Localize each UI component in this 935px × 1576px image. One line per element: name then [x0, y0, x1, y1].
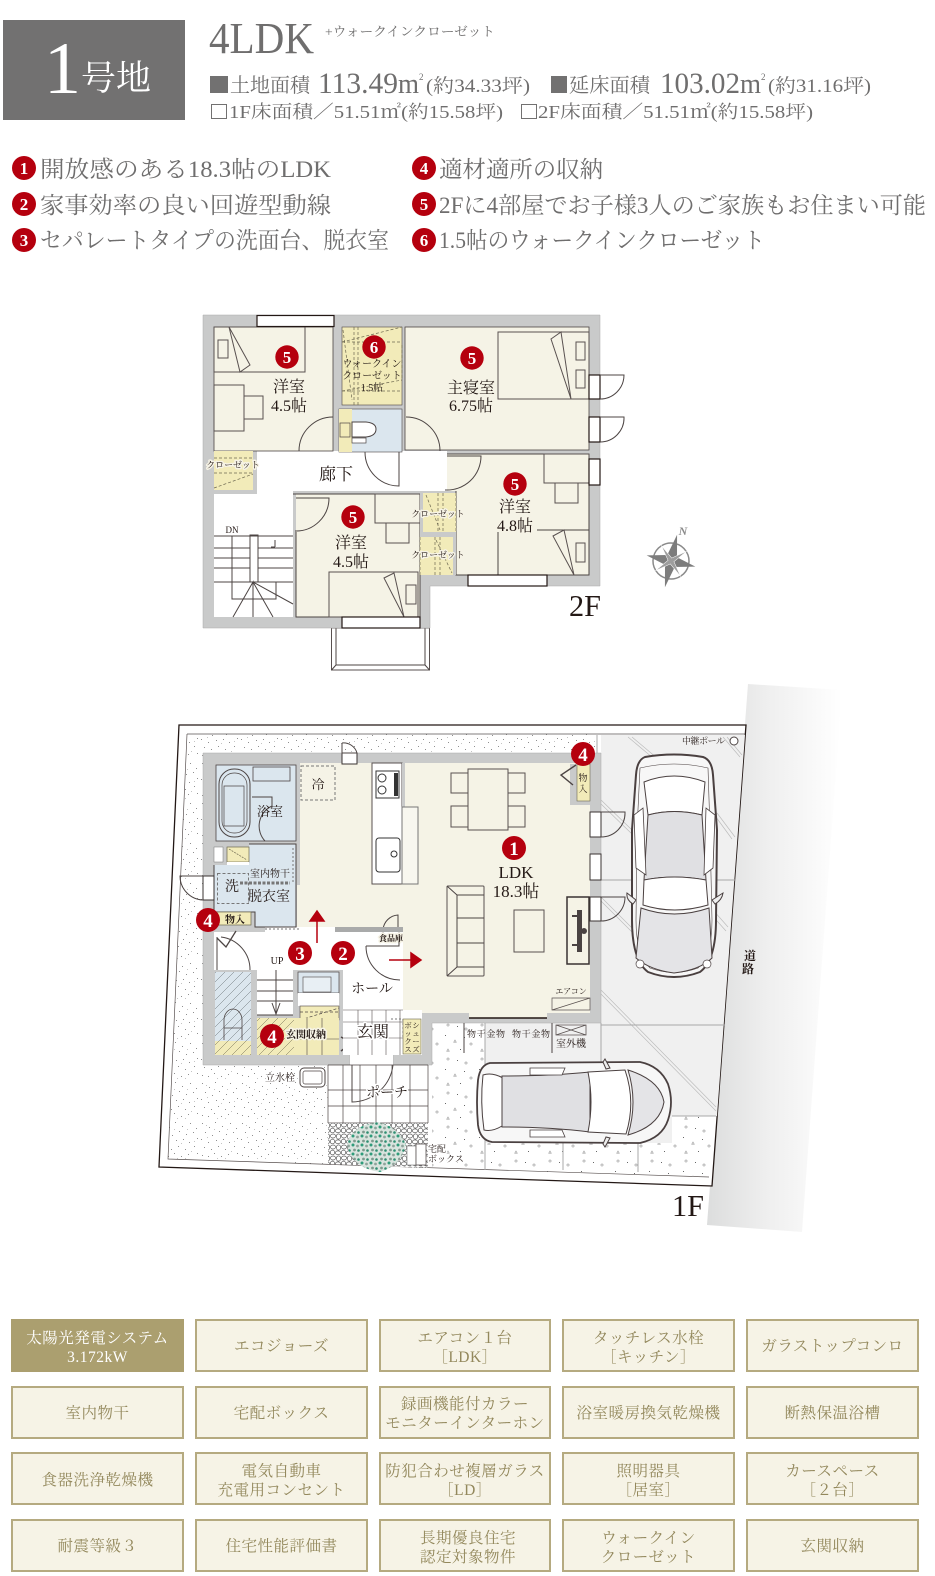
compass [641, 524, 701, 593]
shoes closet: ス [404, 1045, 412, 1054]
item: insulated tub: 断熱保温浴槽 [784, 1404, 881, 1422]
road: 道 [744, 948, 756, 963]
room labels 1F: UP [271, 956, 284, 967]
item: walk-in closet: クローゼット [601, 1549, 696, 1566]
item: car space: カースペース [785, 1463, 880, 1480]
arrow: up [310, 911, 324, 943]
drying hardware and outdoor unit: 物干金物 [512, 1028, 550, 1039]
item: intercom: 録画機能付カラー [401, 1395, 529, 1413]
stairs 1F [257, 970, 293, 1015]
wash basin [298, 972, 339, 1006]
item: seismic grade [12, 1520, 183, 1571]
item: security glass: ［LD］ [438, 1481, 492, 1499]
air conditioner [552, 987, 590, 1010]
interior walls near stairs [214, 970, 343, 1055]
storage top right: 物 [578, 772, 588, 783]
garden tap [265, 1068, 325, 1087]
feature 3: 3 [20, 231, 28, 250]
windows 1F [203, 753, 601, 921]
washroom [214, 844, 296, 927]
header: floor area lines: m [740, 69, 761, 100]
dining set [451, 769, 525, 830]
label: 2F: 2F [569, 588, 601, 623]
item: insulated tub [747, 1387, 918, 1438]
item: EV outlet [196, 1453, 367, 1504]
gravel parking front [432, 1023, 717, 1177]
floor plan: 1F [159, 725, 746, 1223]
car: horizontal [477, 1059, 671, 1147]
entrance storage [257, 1006, 352, 1055]
site boundary [159, 725, 746, 1186]
air conditioner: エアコン [555, 987, 587, 996]
room labels 2F: クローゼット [206, 460, 260, 470]
storage by washroom [216, 912, 251, 925]
header: floor area lines: 1F床面積／51.51㎡(約15.58坪) [229, 101, 503, 123]
header: floor area lines [210, 67, 871, 123]
coffee table [514, 910, 544, 952]
shoes closet: ッ [404, 1029, 412, 1038]
storage top right [561, 764, 590, 805]
toilet 2F [339, 409, 402, 452]
room labels 1F: 18.3帖 [493, 882, 539, 901]
item: glass cooktop [747, 1320, 918, 1371]
stone bed [328, 1123, 428, 1168]
room: western room top-left [214, 327, 333, 451]
item: touchless faucet: ［キッチン］ [601, 1348, 696, 1366]
label: 1F: 1F [672, 1188, 704, 1223]
item: walk-in closet: ウォークイン [601, 1530, 696, 1547]
header: floor area lines: (約31.16坪) [768, 75, 871, 97]
room labels 2F: 洋室 [273, 378, 305, 396]
drying hardware and outdoor unit: 物干金物 [467, 1028, 505, 1039]
header: lot badge [3, 20, 185, 120]
header: floor area lines: 113.49 [318, 67, 398, 100]
markers 1F: 4 [578, 745, 588, 766]
room labels 2F: クローゼット [411, 509, 465, 519]
entrance: 玄関 [357, 1023, 389, 1041]
pantry: 食品庫 [379, 933, 403, 943]
porch [328, 1065, 428, 1123]
room labels 2F: 6.75帖 [449, 397, 493, 415]
balcony [332, 628, 430, 670]
item: air conditioner [380, 1320, 550, 1371]
feature 2: 2 [20, 195, 28, 214]
markers 2F: 5 [349, 508, 357, 527]
item: performance report: 住宅性能評価書 [225, 1537, 338, 1555]
markers 1F: 1 [509, 839, 519, 860]
delivery box [407, 1143, 464, 1165]
item: touchless faucet [563, 1320, 734, 1371]
room: western room 4.8 [447, 454, 589, 575]
feature list [12, 156, 926, 253]
header: floor area lines: 2 [419, 72, 424, 82]
door swings 2F [295, 375, 624, 531]
item: solar [11, 1319, 184, 1372]
bathroom [216, 765, 296, 841]
item: eco jaws: エコジョーズ [234, 1337, 329, 1355]
room labels 2F: ウォークイン [342, 358, 402, 370]
stairs 2F [214, 535, 293, 617]
room labels 2F: クローゼット [411, 550, 465, 560]
LDK floor [297, 763, 590, 1013]
feature 4: 4 [420, 159, 429, 178]
item: touchless faucet: タッチレス水栓 [593, 1329, 704, 1347]
markers 1F: 3 [295, 944, 305, 965]
gravel garden left and top [168, 734, 597, 1164]
markers 1F: 2 [338, 944, 348, 965]
hall floor [214, 932, 403, 1013]
header: floor area lines: 延床面積 [569, 74, 652, 97]
room labels 1F [225, 804, 539, 997]
entrance storage: 玄関収納 [286, 1028, 326, 1041]
item: long-life housing [380, 1520, 550, 1571]
room labels 1F: 浴室 [257, 804, 283, 819]
walk-in closet [342, 327, 402, 405]
header: floor area lines: 103.02 [660, 67, 740, 100]
feature 2: 家事効率の良い回遊型動線 [40, 193, 331, 218]
door swings 1F [180, 743, 625, 921]
item: glass cooktop: ガラストップコンロ [761, 1337, 904, 1355]
road [707, 684, 842, 1232]
header: lot badge: 1 [44, 28, 81, 110]
item: bath dryer [563, 1387, 734, 1438]
feature 3: セパレートタイプの洗面台、脱衣室 [40, 228, 389, 253]
room labels 2F: 洋室 [335, 534, 367, 552]
delivery box: 宅配 [428, 1143, 446, 1154]
markers 2F: 5 [468, 349, 476, 368]
storage top right: 入 [578, 784, 588, 794]
item: lighting: ［居室］ [616, 1481, 681, 1499]
item: car space: ［２台］ [800, 1481, 865, 1499]
shoes closet: ュ [412, 1029, 420, 1038]
room labels 2F: 4.8帖 [497, 517, 533, 535]
2F walls [203, 315, 600, 628]
compass: N [678, 524, 689, 538]
header: floor area lines: 土地面積 [230, 74, 312, 97]
item: delivery box [196, 1387, 367, 1438]
road: 路 [742, 961, 754, 976]
room labels 2F: 主寝室 [447, 378, 495, 397]
item: entrance storage [747, 1520, 918, 1571]
room labels 2F: 1.5帖 [361, 381, 383, 394]
item: dishwasher: 食器洗浄乾燥機 [41, 1471, 154, 1489]
feature 6: 6 [420, 231, 428, 250]
tv stand [567, 897, 589, 964]
item: long-life housing: 認定対象物件 [420, 1548, 516, 1566]
markers 2F [275, 335, 527, 529]
feature 1: 1 [20, 159, 28, 178]
room labels 2F: 洋室 [499, 498, 531, 516]
header: floor area lines: 2F床面積／51.51㎡(約15.58坪) [538, 101, 813, 123]
pole label: 中継ポール [682, 735, 725, 746]
feature 6: 1.5帖のウォークインクローゼット [439, 228, 765, 253]
room labels 1F: 脱衣室 [248, 888, 290, 905]
item: indoor drying: 室内物干 [65, 1404, 130, 1422]
item: solar: 太陽光発電システム [26, 1329, 169, 1347]
markers 1F [196, 742, 595, 1048]
shoes closet: ズ [412, 1045, 420, 1054]
drying hardware and outdoor unit [464, 1023, 587, 1053]
toilet 1F [215, 931, 251, 1055]
entrance [343, 1010, 422, 1065]
item: car space [747, 1453, 918, 1504]
header: plan type: +ウォークインクローゼット [325, 24, 495, 39]
item: intercom: モニターインターホン [385, 1414, 545, 1432]
room labels 1F: LDK [499, 863, 534, 882]
item: solar: 3.172kW [67, 1349, 128, 1366]
room labels 2F [206, 358, 533, 571]
shoes closet: シ [412, 1021, 420, 1030]
drying hardware and outdoor unit: 室外機 [556, 1037, 587, 1050]
item: eco jaws [196, 1320, 367, 1371]
room labels 2F: 廊下 [319, 465, 353, 484]
item: long-life housing: 長期優良住宅 [420, 1529, 516, 1547]
item: security glass: 防犯合わせ複層ガラス [385, 1461, 545, 1480]
item: lighting [563, 1453, 734, 1504]
item: delivery box: 宅配ボックス [234, 1404, 329, 1422]
delivery box: ボックス [428, 1154, 464, 1164]
room labels 2F: クローゼット [342, 370, 402, 382]
item: air conditioner: ［LDK］ [432, 1348, 498, 1366]
closets between rooms [420, 491, 456, 575]
pantry [379, 915, 403, 943]
windows 2F [257, 316, 600, 628]
pole label [682, 735, 738, 746]
car: vertical [627, 754, 723, 977]
hall door and arrows [335, 927, 403, 980]
header: lot badge: 号地 [81, 59, 151, 98]
shoes closet: ク [404, 1037, 412, 1046]
item: seismic grade: 耐震等級３ [57, 1537, 138, 1555]
item: lighting: 照明器具 [616, 1462, 681, 1480]
planting [347, 1122, 406, 1172]
shoes closet: ボ [404, 1021, 412, 1030]
feature 5: 5 [420, 195, 428, 214]
room labels 2F: 4.5帖 [333, 553, 369, 571]
feature 5: 2Fに4部屋でお子様3人のご家族もお住まい可能 [439, 193, 926, 218]
markers 2F: 5 [511, 475, 519, 494]
markers 2F: 6 [370, 338, 378, 357]
item: EV outlet: 充電用コンセント [217, 1481, 346, 1499]
header: floor area lines: 2 [761, 72, 766, 82]
room: master bedroom [405, 327, 589, 450]
item: indoor drying [12, 1387, 183, 1438]
item: intercom [380, 1387, 550, 1438]
room labels 1F: ホール [351, 982, 393, 997]
1F walls [203, 753, 601, 1065]
item: entrance storage: 玄関収納 [800, 1537, 865, 1555]
header: floor area lines: (約34.33坪) [426, 75, 530, 97]
room labels 1F: 物入 [225, 913, 245, 926]
hall and stairwell floor [214, 451, 447, 617]
room labels 1F: 室内物干 [250, 867, 290, 880]
room labels 2F: 4.5帖 [271, 397, 307, 415]
feature 4: 適材適所の収納 [439, 157, 603, 182]
feature 1: 開放感のある18.3帖のLDK [40, 157, 331, 182]
equipment grid [11, 1319, 918, 1571]
fridge space: 冷 [311, 777, 325, 792]
markers 2F: 5 [283, 348, 291, 367]
label: DN: DN [226, 525, 239, 535]
markers 1F: 4 [267, 1027, 277, 1048]
arrow: right [389, 953, 421, 967]
concrete parking [485, 735, 745, 1170]
header: plan type [209, 14, 495, 63]
item: EV outlet: 電気自動車 [241, 1462, 322, 1480]
shoes closet: ー [412, 1037, 420, 1046]
item: security glass [380, 1453, 550, 1504]
kitchen [372, 763, 418, 884]
item: bath dryer: 浴室暖房換気乾燥機 [576, 1404, 721, 1422]
header: floor area lines: m [398, 69, 419, 100]
room: western room bottom-left [293, 494, 420, 617]
closet top-left [214, 451, 253, 490]
markers 1F: 4 [203, 911, 213, 932]
room labels 1F: 洗 [225, 879, 239, 895]
fridge space [301, 766, 335, 800]
item: dishwasher [12, 1453, 183, 1504]
porch: ポーチ [366, 1085, 408, 1101]
item: walk-in closet [563, 1520, 734, 1571]
sofa [447, 886, 484, 976]
floor plan: 2F [203, 315, 624, 670]
item: performance report [196, 1520, 367, 1571]
shoes closet [403, 1019, 421, 1054]
header: plan type: 4LDK [209, 14, 314, 63]
item: air conditioner: エアコン１台 [417, 1329, 513, 1347]
garden tap: 立水栓 [265, 1071, 295, 1084]
